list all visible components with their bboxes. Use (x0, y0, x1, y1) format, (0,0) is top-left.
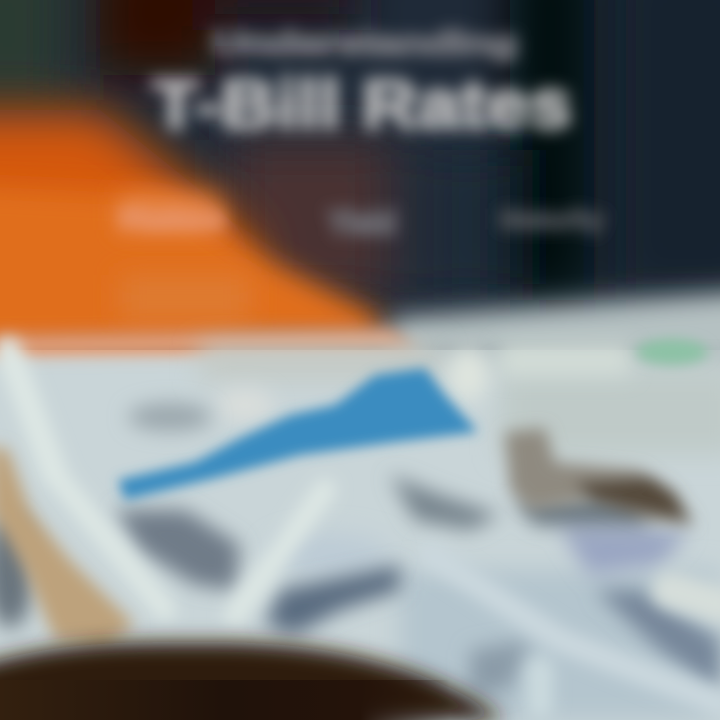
chart: blue area shape (118, 368, 478, 500)
panel: dark header background (0, 0, 720, 350)
chart: grey patches (0, 403, 720, 695)
object: dark brown foreground (0, 642, 505, 720)
panel: orange wedge (0, 110, 385, 350)
chart: brown marker stroke (505, 428, 695, 525)
label: right column: Maturity (500, 204, 605, 234)
heading: main title: T-Bill Rates (152, 65, 572, 143)
title (152, 25, 572, 143)
text block: three columns of labels (120, 203, 605, 242)
label: middle column: Yield (328, 204, 396, 242)
heading: kicker line: Understanding (212, 25, 518, 61)
panel: light chart paper (0, 290, 720, 720)
label: left column: Rates (120, 203, 224, 234)
pencil: tan strip (0, 445, 135, 645)
icon: green tag (636, 339, 708, 365)
chart: white ruled stripes (8, 350, 720, 706)
